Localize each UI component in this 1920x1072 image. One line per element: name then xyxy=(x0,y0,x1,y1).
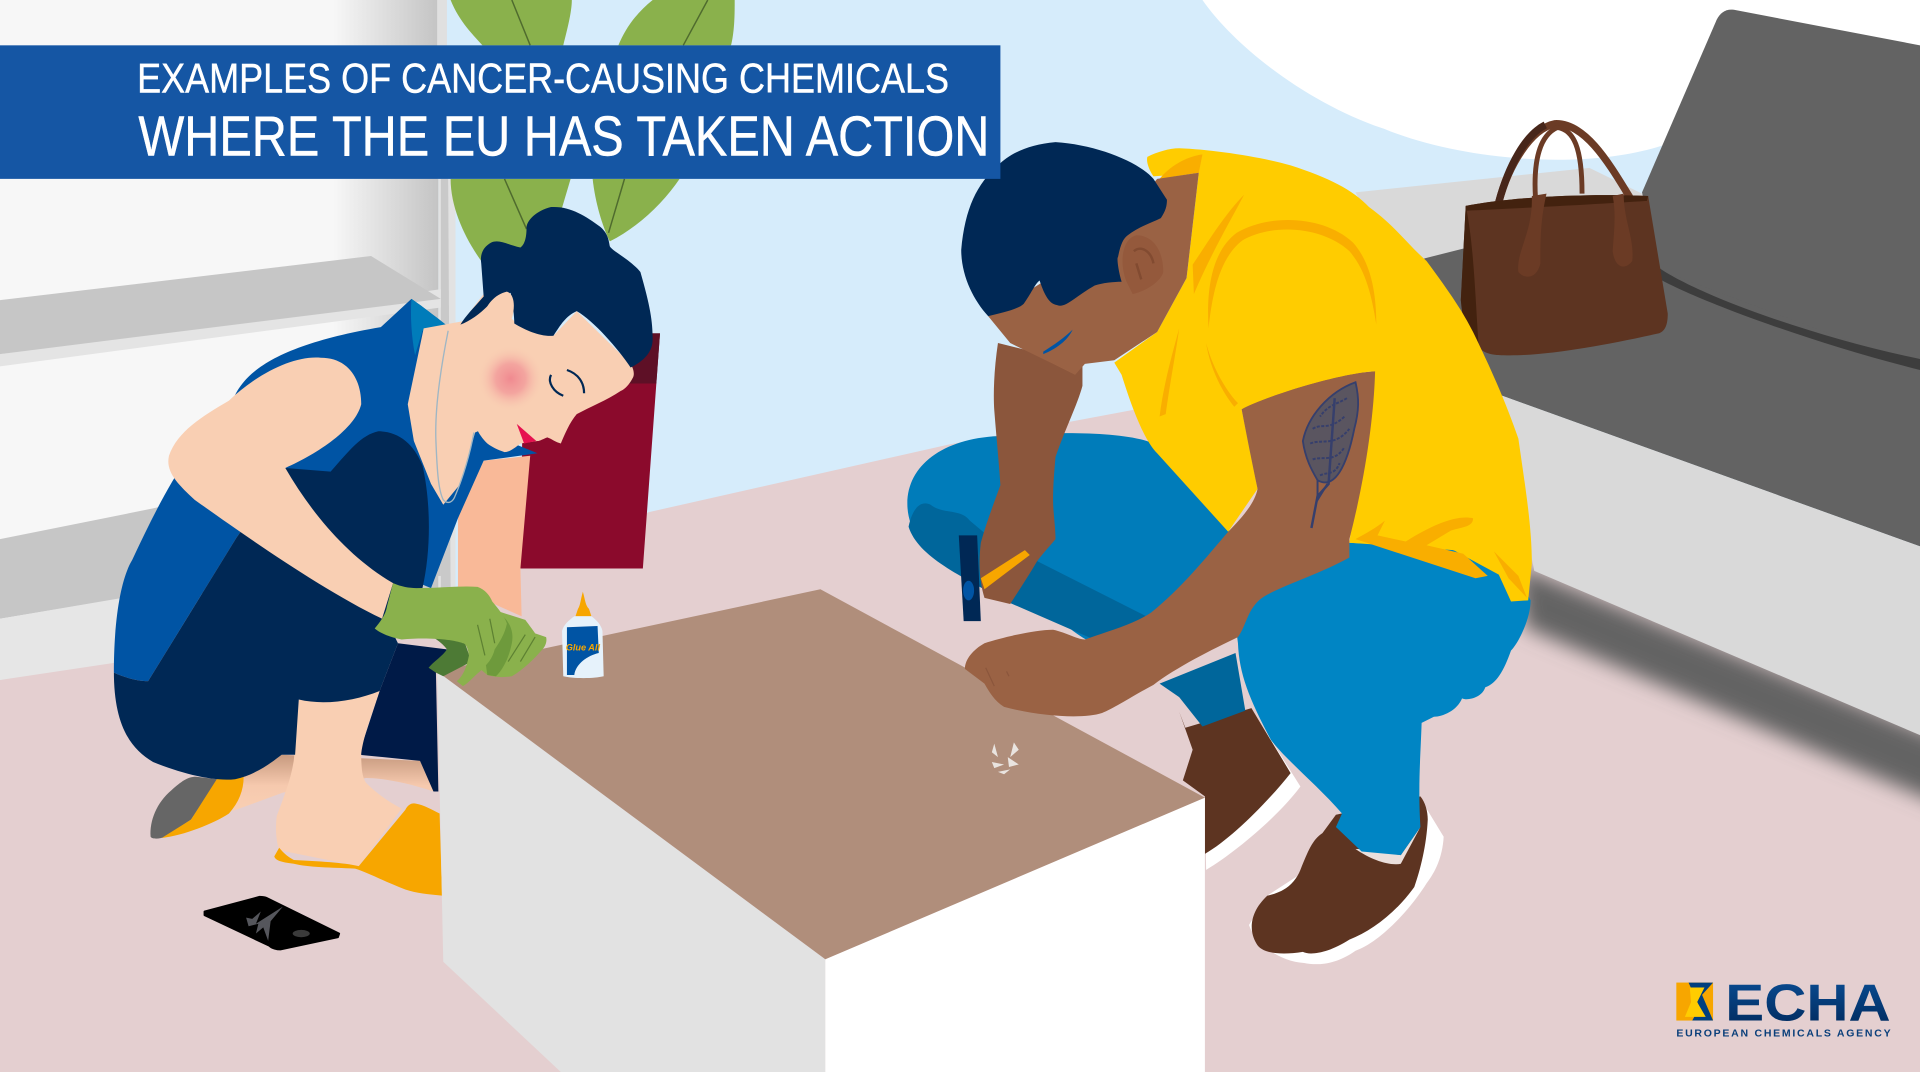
background: floor xyxy=(0,368,1920,1072)
title line 1: EXAMPLES OF CANCER-CAUSING CHEMICALS xyxy=(137,54,949,102)
sofa xyxy=(1356,10,1920,833)
jeans: back shin xyxy=(1160,653,1245,727)
logo subtitle: EUROPEAN CHEMICALS AGENCY xyxy=(1676,1027,1891,1039)
pants xyxy=(114,431,429,780)
eye xyxy=(1043,330,1073,354)
far arm xyxy=(458,456,530,616)
background: white cloud xyxy=(1202,0,1920,160)
neck and chest xyxy=(408,321,484,505)
front leg xyxy=(276,691,402,866)
ear xyxy=(484,292,514,342)
man xyxy=(907,142,1532,964)
table right face xyxy=(825,798,1205,1072)
glue bottle: Glue All xyxy=(566,643,600,653)
back leg shade xyxy=(233,755,433,811)
jeans: left thigh xyxy=(907,433,1237,646)
front boot xyxy=(1249,796,1444,964)
title line 2: WHERE THE EU HAS TAKEN ACTION xyxy=(138,105,989,168)
face xyxy=(463,294,634,452)
ECHA logo xyxy=(1676,974,1891,1039)
jeans shade xyxy=(909,503,1151,646)
table left face xyxy=(437,671,825,1072)
dark pants behind xyxy=(359,643,447,791)
plant leaves xyxy=(451,0,735,261)
table top xyxy=(437,589,1205,959)
hammer xyxy=(959,535,1030,621)
red chair xyxy=(520,333,660,568)
logo mark xyxy=(1676,983,1713,1021)
head xyxy=(988,173,1199,375)
collar xyxy=(411,299,451,355)
far arm and hand xyxy=(980,343,1082,604)
back slipper xyxy=(150,777,244,839)
man's back boot xyxy=(1179,708,1300,870)
closed eye xyxy=(550,370,584,396)
glue bottle xyxy=(562,592,604,678)
handbag xyxy=(1461,124,1668,355)
necklace xyxy=(436,331,474,502)
front slipper xyxy=(274,803,442,896)
near arm and hand xyxy=(965,371,1375,716)
left wall and window sill xyxy=(0,0,456,680)
hair xyxy=(961,142,1167,316)
tattoo xyxy=(1303,382,1358,528)
woman xyxy=(114,207,653,896)
finger creases xyxy=(986,668,1009,686)
woman's gloves xyxy=(375,583,546,686)
table xyxy=(437,589,1205,1072)
nails xyxy=(992,742,1019,774)
shirt xyxy=(114,299,538,681)
hair xyxy=(460,207,653,368)
sleeve edge xyxy=(1239,365,1375,409)
blush xyxy=(478,345,544,412)
near arm xyxy=(168,358,393,619)
jeans: front leg xyxy=(1236,543,1531,855)
shirt xyxy=(1114,148,1532,602)
lips xyxy=(517,424,536,444)
title banner xyxy=(0,45,1000,179)
phone xyxy=(204,897,339,949)
logo wordmark: ECHA xyxy=(1725,974,1891,1032)
ear xyxy=(1123,235,1163,294)
shirt folds xyxy=(1160,154,1527,598)
